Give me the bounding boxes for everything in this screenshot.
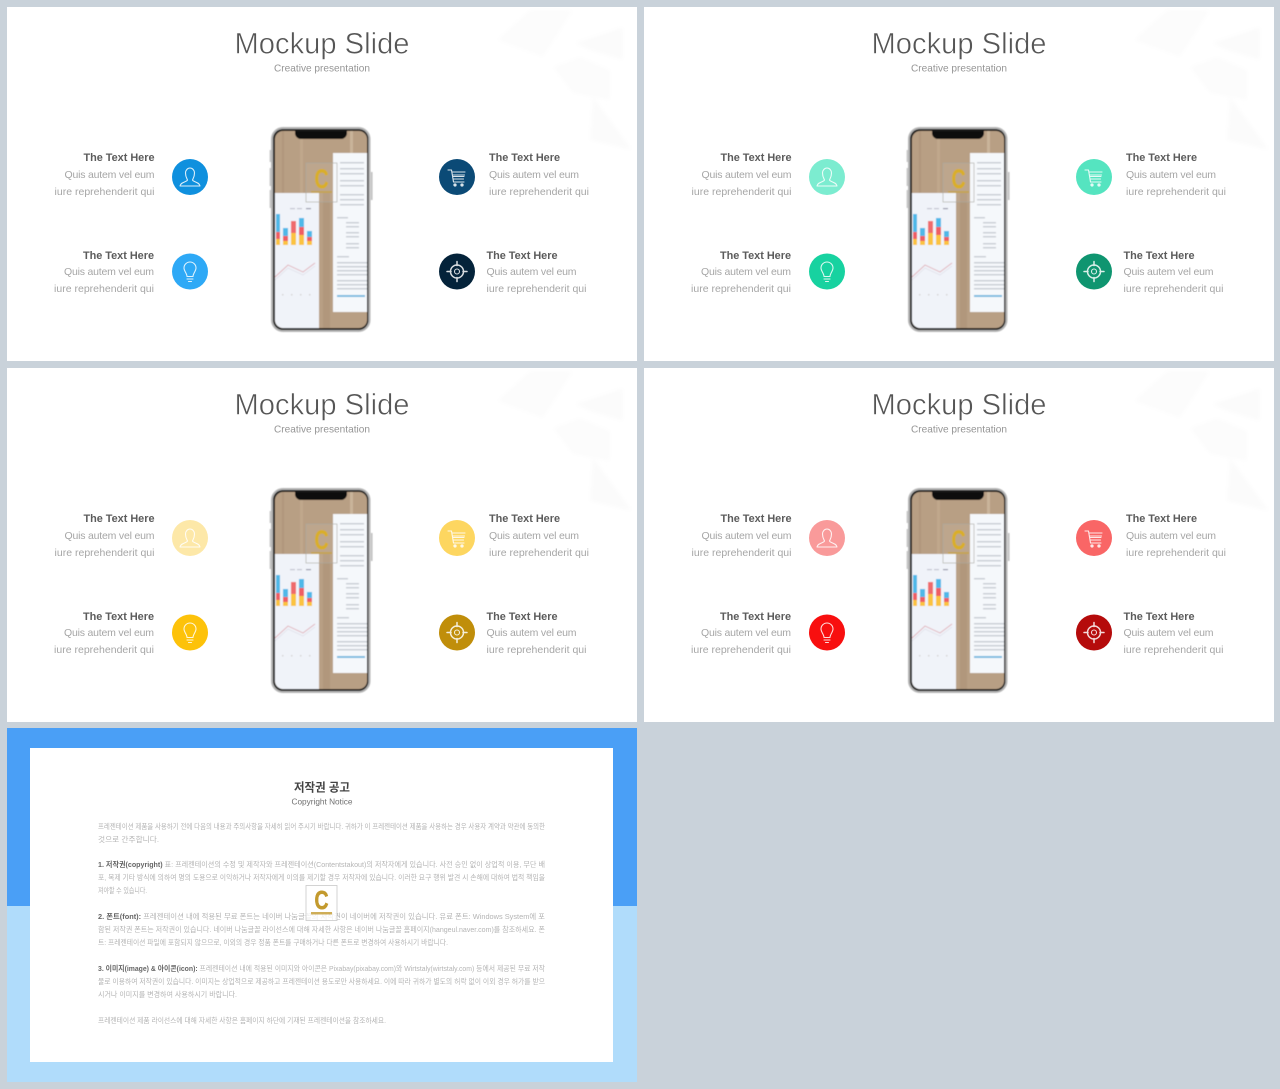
text block: top left: Quis autem vel eum xyxy=(64,530,155,542)
text block: top left: iure reprehenderit qui xyxy=(54,547,154,559)
intro paragraph: 것으로 간주합니다. xyxy=(98,834,159,844)
intro paragraph: 프레젠테이션 제품을 사용하기 전에 다음의 내용과 주의사항을 자세히 읽어 주시기 바랍니다. 귀하가 이 프레젠테이션 제품을 사용하는 경우 사용자 계약과 약관에 동의한 xyxy=(98,821,545,831)
blue background upper xyxy=(7,728,637,906)
text block: top left: iure reprehenderit qui xyxy=(692,186,792,198)
text block: bottom left: The Text Here xyxy=(83,250,154,262)
text block: bottom left xyxy=(54,611,154,656)
background polygon watermark xyxy=(497,10,632,150)
text block: top right: The Text Here xyxy=(489,513,560,525)
panel: mockup slide yellow xyxy=(7,368,637,722)
copyright paragraph: 져야할 수 있습니다. xyxy=(98,885,147,895)
text block: bottom left: iure reprehenderit qui xyxy=(691,644,791,656)
title: Mockup Slide xyxy=(234,388,410,422)
icon: light bulb xyxy=(809,254,845,290)
panel: mockup slide red xyxy=(644,368,1274,722)
notice heading: 저작권 공고 xyxy=(294,780,350,794)
text block: top right xyxy=(1126,152,1226,198)
text block: bottom left: iure reprehenderit qui xyxy=(691,283,791,295)
text block: bottom left: The Text Here xyxy=(720,250,791,262)
text block: top right: The Text Here xyxy=(1126,513,1197,525)
icon: cart xyxy=(1076,520,1112,556)
text block: top left xyxy=(692,513,792,559)
panel: copyright notice xyxy=(7,728,637,1082)
intro paragraph xyxy=(98,821,545,844)
subtitle: Creative presentation xyxy=(274,62,370,74)
icon: cart xyxy=(1076,159,1112,195)
text block: bottom right: The Text Here xyxy=(1124,611,1194,623)
text block: top right: iure reprehenderit qui xyxy=(489,186,589,198)
title: Mockup Slide xyxy=(234,28,410,60)
text block: top right: The Text Here xyxy=(1126,152,1197,164)
background polygon watermark xyxy=(1134,10,1269,150)
text block: top left: The Text Here xyxy=(84,513,154,525)
text block: top right: iure reprehenderit qui xyxy=(489,547,589,559)
text block: bottom right: iure reprehenderit qui xyxy=(1124,644,1224,656)
text block: bottom left xyxy=(54,250,154,295)
text block: top right: Quis autem vel eum xyxy=(489,169,579,181)
white notice card xyxy=(30,748,613,1062)
image and icon paragraph: 시거나 이미지를 변경하여 사용하시기 바랍니다. xyxy=(98,989,237,999)
text block: top left xyxy=(692,152,792,198)
icon: light bulb xyxy=(809,614,845,650)
text block: bottom right: iure reprehenderit qui xyxy=(486,283,586,295)
phone mockup xyxy=(906,127,1010,332)
title: Mockup Slide xyxy=(872,388,1046,422)
image and icon paragraph: 물로 이용하여 저작권이 있습니다. 이미지는 상업적으로 제공하고 프레젠테이션 용도로만 사용하세요. 이에 따라 귀하가 별도의 허락 없이 이외 경우 허가를 받으 xyxy=(98,976,545,986)
text block: bottom right: The Text Here xyxy=(1124,250,1194,262)
text block: bottom left: Quis autem vel eum xyxy=(64,266,154,278)
text block: top left: The Text Here xyxy=(84,152,154,164)
text block: bottom right xyxy=(1124,611,1224,656)
icon: target xyxy=(1076,254,1112,290)
text block: top right: iure reprehenderit qui xyxy=(1126,547,1226,559)
text block: bottom left xyxy=(691,611,791,656)
icon: person xyxy=(172,159,208,195)
text block: top right xyxy=(489,513,589,559)
font paragraph xyxy=(98,911,545,947)
text block: bottom right: iure reprehenderit qui xyxy=(486,644,586,656)
light blue background lower xyxy=(7,906,637,1082)
text block: top right xyxy=(1126,513,1226,559)
copyright paragraph xyxy=(98,859,545,895)
text block: bottom left: iure reprehenderit qui xyxy=(54,644,154,656)
text block: top right: The Text Here xyxy=(489,152,560,164)
subtitle: Creative presentation xyxy=(911,62,1007,74)
background polygon watermark xyxy=(497,371,632,511)
text block: top right: Quis autem vel eum xyxy=(1126,169,1216,181)
text block: bottom left: iure reprehenderit qui xyxy=(54,283,154,295)
text block: top left xyxy=(54,152,155,198)
text block: top left: Quis autem vel eum xyxy=(702,169,792,181)
text block: bottom right: Quis autem vel eum xyxy=(486,266,577,278)
icon: cart xyxy=(439,159,475,195)
icon: cart xyxy=(439,520,475,556)
text block: bottom left xyxy=(691,250,791,295)
font paragraph: 함된 저작권 폰트는 저작권이 있습니다. 네이버 나눔글꼴 라이선스에 대해 자세한 사항은 네이버 나눔글꼴 홈페이지(hangeul.naver.com)를 참조하세요. 폰 xyxy=(98,924,545,934)
text block: top right xyxy=(489,152,589,198)
text block: bottom right: The Text Here xyxy=(486,611,558,623)
text block: bottom left: Quis autem vel eum xyxy=(64,627,154,639)
copyright paragraph: 포, 복제 기타 방식에 의하여 명의 도용으로 이익하거나 저작자에게 이의를 제기할 경우 저작자에 있습니다. 이러한 요구 행위 발견 시 손해에 대하여 법적 책임을 xyxy=(98,872,545,882)
icon: person xyxy=(809,520,845,556)
text block: bottom right: The Text Here xyxy=(486,250,558,262)
copyright paragraph: 1. 저작권(copyright) 표: 프레젠테이션의 수정 및 제작자와 프레젠테이션(Contentstakout)의 저작자에게 있습니다. 사전 승인 없이 상업적 이용, 무단 배 xyxy=(98,859,545,869)
image and icon paragraph: 3. 이미지(image) & 아이콘(icon): 프레젠테이션 내에 적용된 이미지와 아이콘은 Pixabay(pixabay.com)와 Wirtstaly(wirtstaly.com) 등에서 제공된 무료 저작 xyxy=(98,963,545,973)
text block: bottom right xyxy=(1124,250,1224,295)
text block: top right: Quis autem vel eum xyxy=(1126,530,1216,542)
subtitle: Creative presentation xyxy=(274,424,370,436)
icon: person xyxy=(172,520,208,556)
text block: top left: Quis autem vel eum xyxy=(702,530,792,542)
phone mockup xyxy=(270,127,372,332)
font paragraph: 2. 폰트(font): 프레젠테이션 내에 적용된 무료 폰트는 네이버 나눔글꼴의 저작권이 네이버에 저작권이 있습니다. 유료 폰트: Windows System에 포 xyxy=(98,911,545,921)
image and icon paragraph xyxy=(98,963,545,999)
text block: bottom left: Quis autem vel eum xyxy=(701,627,791,639)
title: Mockup Slide xyxy=(872,28,1046,60)
text block: top left: The Text Here xyxy=(720,152,792,164)
text block: bottom left: The Text Here xyxy=(720,611,791,623)
icon: target xyxy=(439,254,475,290)
panel: mockup slide green xyxy=(644,7,1274,361)
text block: top left: Quis autem vel eum xyxy=(64,169,155,181)
logo watermark: C xyxy=(314,885,329,915)
text block: bottom right: Quis autem vel eum xyxy=(1124,627,1214,639)
icon: light bulb xyxy=(172,254,208,290)
icon: target xyxy=(1076,614,1112,650)
text block: bottom left: The Text Here xyxy=(83,611,154,623)
logo watermark xyxy=(306,885,337,920)
phone mockup xyxy=(906,488,1010,693)
text block: bottom right: Quis autem vel eum xyxy=(486,627,577,639)
text block: bottom right xyxy=(486,250,586,295)
icon: light bulb xyxy=(172,614,208,650)
text block: top left: The Text Here xyxy=(720,513,792,525)
text block: top left xyxy=(54,513,155,559)
text block: top left: iure reprehenderit qui xyxy=(54,186,154,198)
panel: mockup slide blue xyxy=(7,7,637,361)
text block: bottom right: Quis autem vel eum xyxy=(1124,266,1214,278)
font paragraph: 트: 프레젠테이션 파일에 포함되지 않으므로, 이외의 경우 정품 폰트를 구매하거나 다른 폰트로 변경하여 사용하시기 바랍니다. xyxy=(98,937,448,947)
background polygon watermark xyxy=(1134,371,1269,511)
icon: target xyxy=(439,614,475,650)
text block: top right: Quis autem vel eum xyxy=(489,530,579,542)
text block: bottom left: Quis autem vel eum xyxy=(701,266,791,278)
phone mockup xyxy=(270,488,372,693)
text block: bottom right: iure reprehenderit qui xyxy=(1124,283,1224,295)
notice subheading: Copyright Notice xyxy=(292,796,353,806)
text block: top left: iure reprehenderit qui xyxy=(692,547,792,559)
subtitle: Creative presentation xyxy=(911,424,1007,436)
closing paragraph: 프레젠테이션 제품 라이선스에 대해 자세한 사항은 홈페이지 하단에 기재된 프레젠테이션을 참조하세요. xyxy=(98,1015,386,1025)
text block: top right: iure reprehenderit qui xyxy=(1126,186,1226,198)
text block: bottom right xyxy=(486,611,586,656)
icon: person xyxy=(809,159,845,195)
